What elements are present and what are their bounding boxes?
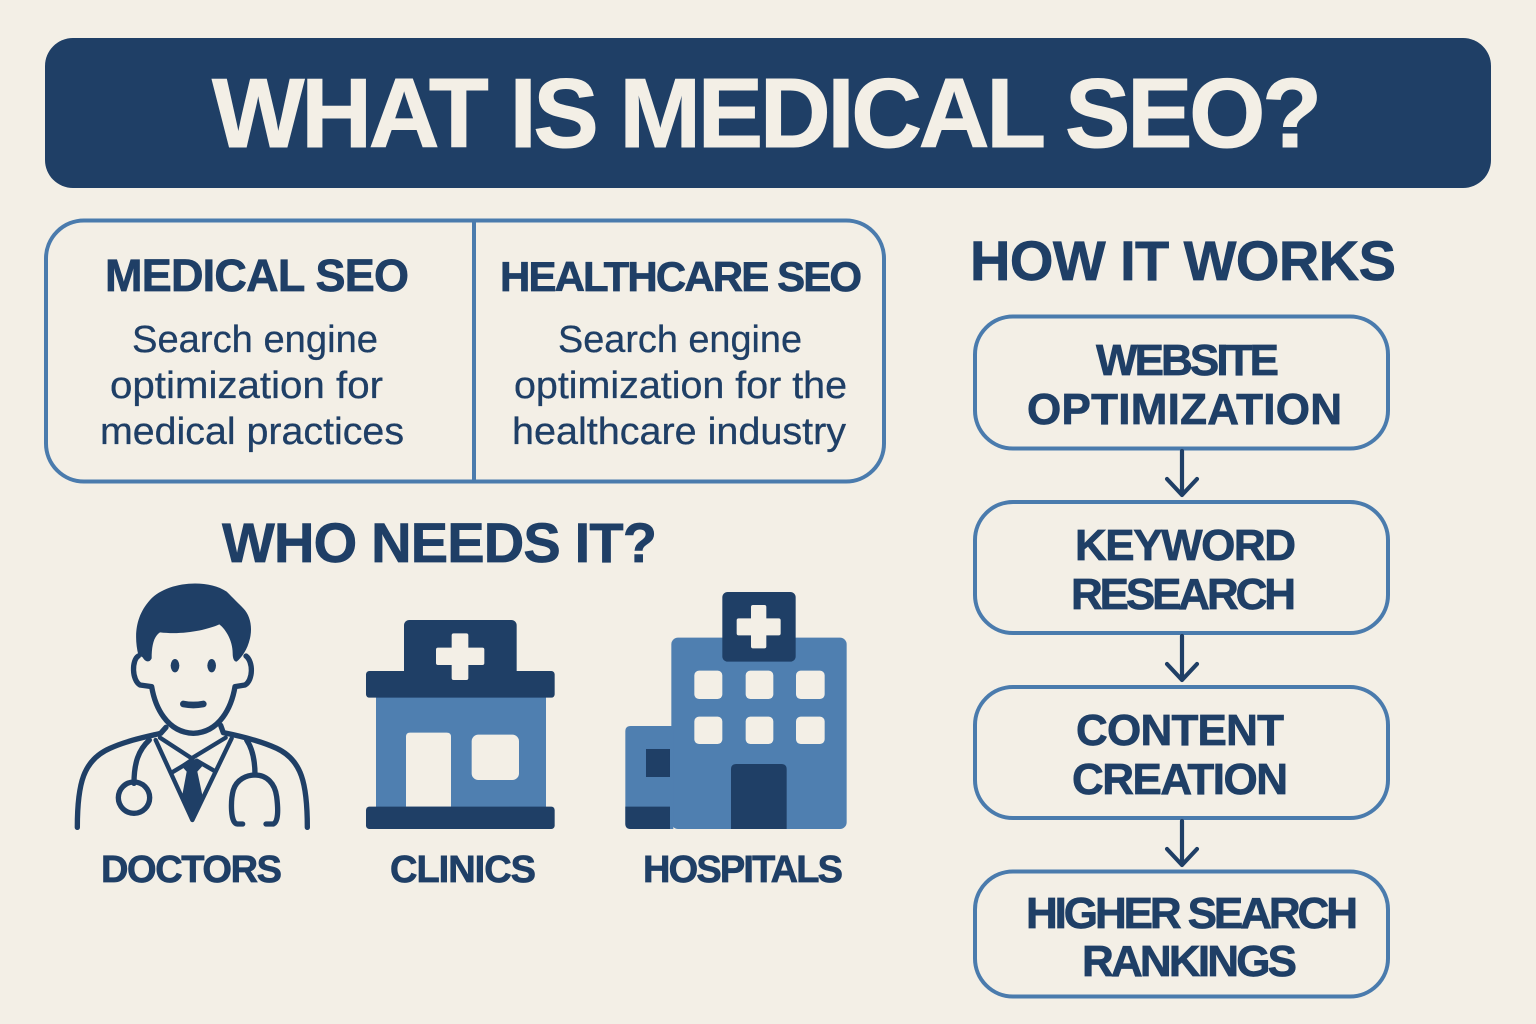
text: healthcare seo definition: healthcare industry: [512, 411, 846, 453]
text: healthcare seo definition: Search engine: [558, 319, 802, 361]
step: content creation: [975, 687, 1388, 818]
text: healthcare seo definition: [512, 319, 847, 453]
step: website optimization: OPTIMIZATION: [1027, 385, 1342, 434]
step: higher search rankings: RANKINGS: [1082, 937, 1297, 986]
icon: hospital: [625, 592, 847, 829]
step: website optimization: [975, 316, 1388, 448]
arrow: step 3 to 4: [1167, 821, 1197, 865]
label: clinics: CLINICS: [390, 849, 536, 891]
step: website optimization: WEBSITE: [1096, 336, 1279, 385]
heading: who needs it: WHO NEEDS IT?: [222, 511, 657, 574]
arrow: step 2 to 3: [1167, 636, 1197, 680]
text: medical seo definition: [100, 319, 404, 453]
heading: how it works: HOW IT WORKS: [970, 229, 1396, 292]
panel: definitions: [46, 220, 884, 482]
step: keyword research: [975, 502, 1388, 633]
text: medical seo definition: optimization for: [110, 365, 383, 407]
arrow: step 1 to 2: [1167, 451, 1197, 495]
step: keyword research: KEYWORD: [1075, 521, 1296, 570]
text: medical seo definition: medical practices: [100, 411, 404, 453]
step: keyword research: RESEARCH: [1071, 570, 1296, 619]
text: healthcare seo definition: optimization for the: [514, 365, 847, 407]
title: WHAT IS MEDICAL SEO?: [212, 58, 1322, 168]
label: doctors: DOCTORS: [101, 849, 282, 891]
step: content creation: CREATION: [1072, 755, 1288, 804]
heading: healthcare seo: HEALTHCARE SEO: [500, 253, 862, 300]
label: hospitals: HOSPITALS: [643, 849, 843, 891]
title banner: [45, 38, 1491, 188]
step: higher search rankings: [975, 872, 1388, 996]
text: medical seo definition: Search engine: [132, 319, 378, 361]
step: content creation: CONTENT: [1076, 706, 1284, 755]
icon: doctor: [77, 584, 307, 827]
icon: clinic: [366, 620, 555, 829]
heading: medical seo: MEDICAL SEO: [105, 250, 409, 301]
step: higher search rankings: HIGHER SEARCH: [1026, 889, 1358, 938]
